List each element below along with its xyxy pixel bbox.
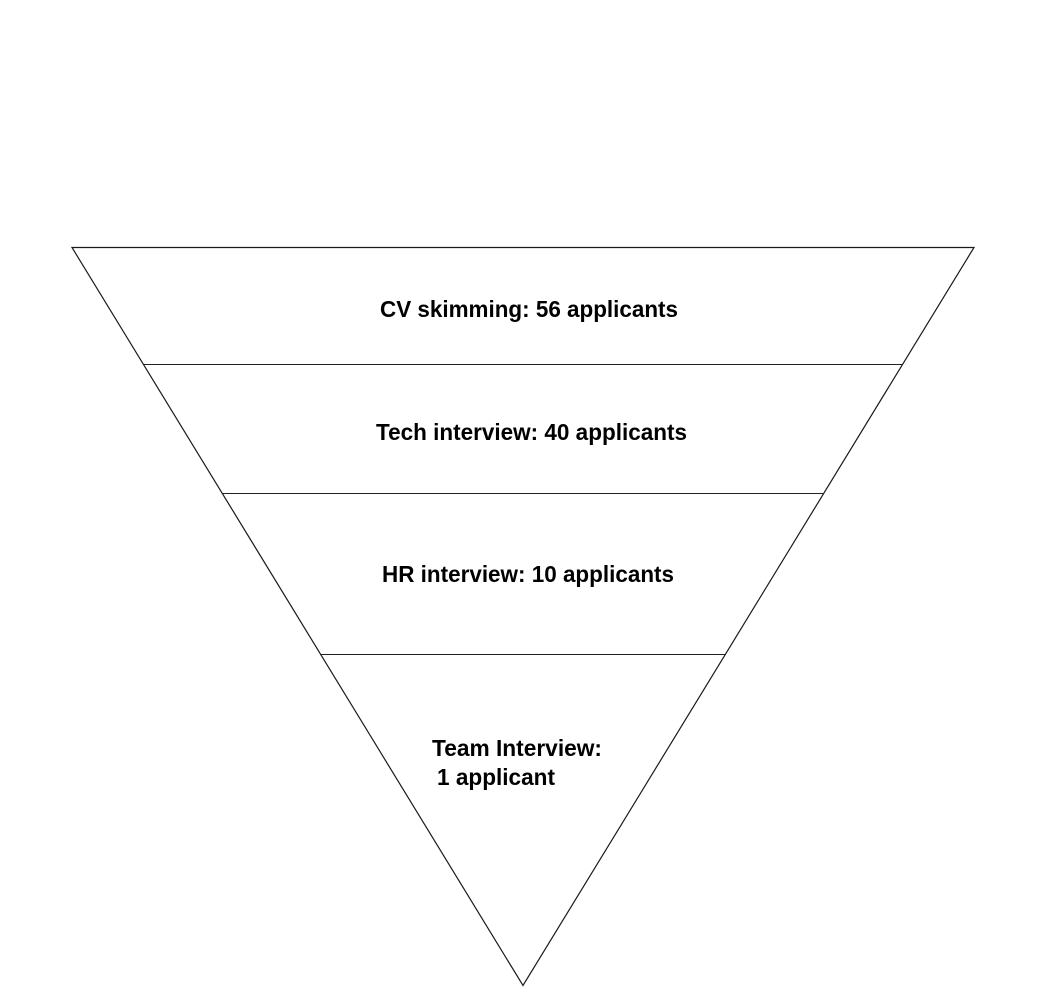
funnel outline — [72, 248, 974, 986]
stage label: CV skimming: CV skimming: 56 applicants — [380, 296, 678, 322]
stage label: Team interview: 1 applicant — [437, 764, 555, 790]
stage label: HR interview: HR interview: 10 applicants — [382, 561, 674, 587]
stage label: Team interview: Team Interview: — [432, 735, 602, 761]
stage divider: CV skimming / Tech interview — [144, 364, 903, 366]
stage label: Team interview — [432, 735, 602, 790]
stage divider: Tech interview / HR interview — [222, 492, 824, 494]
stage divider: HR interview / Team interview — [321, 654, 725, 656]
stage label: Tech interview: Tech interview: 40 applicants — [376, 419, 687, 445]
